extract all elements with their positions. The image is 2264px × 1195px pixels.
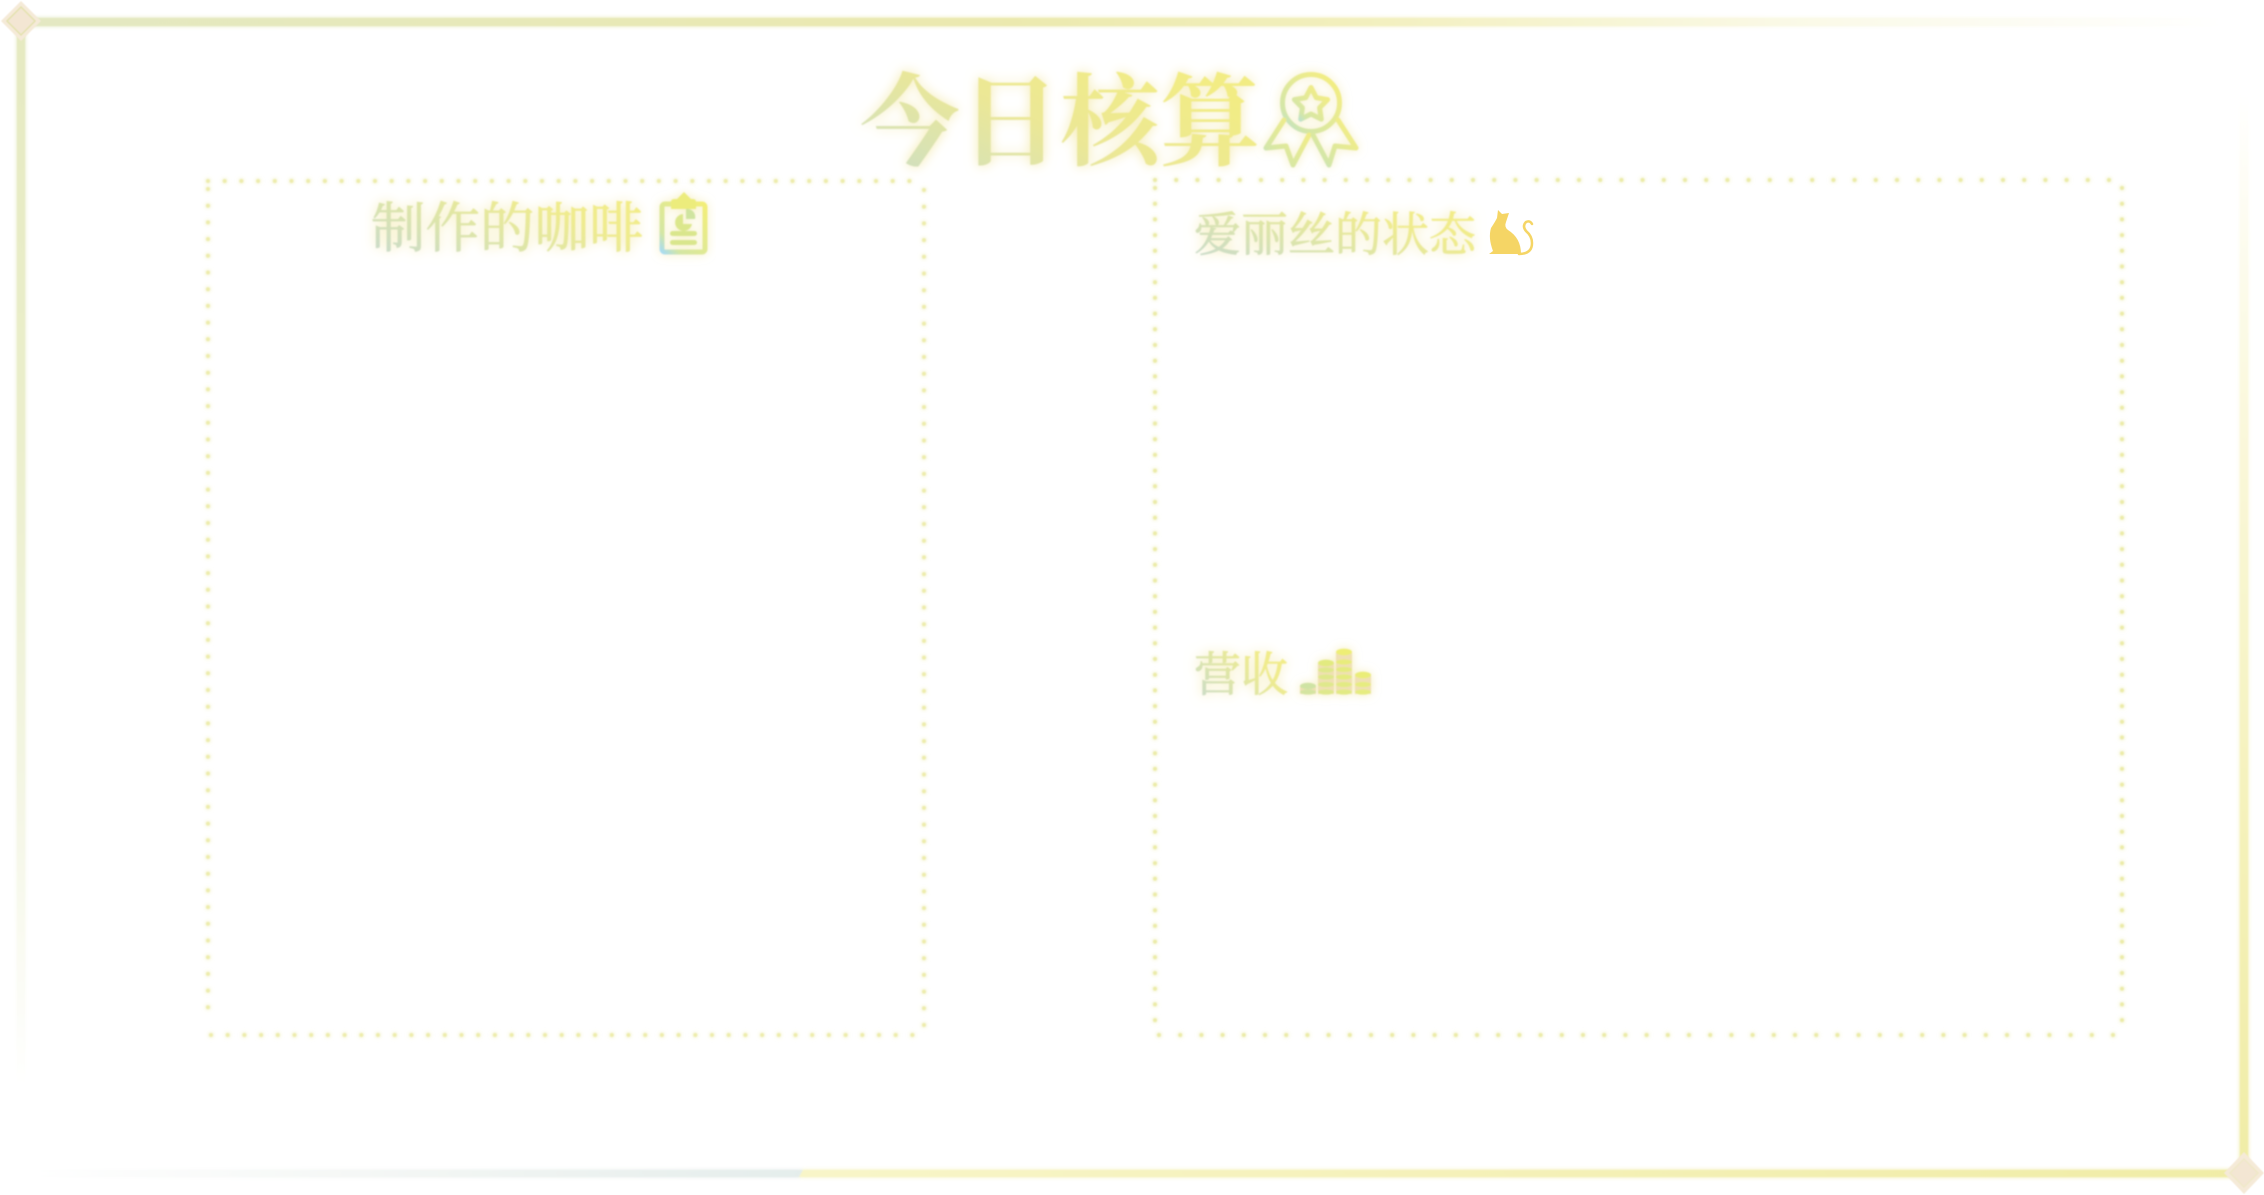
panel: coffee made: [208, 181, 924, 1035]
heading: Alice status: 爱丽丝的状态: [1194, 210, 1477, 262]
heading: coffee made: 制作的咖啡: [371, 198, 644, 259]
corner diamond top-left: [1, 1, 41, 41]
title: 今日核算: [860, 68, 1260, 179]
heading: revenue: 营收: [1194, 650, 1288, 702]
icon: cat: [1489, 210, 1532, 254]
corner diamond bottom-right: [2224, 1152, 2264, 1194]
icon: award badge: [1266, 74, 1356, 165]
icon: coin stacks: [1300, 649, 1371, 695]
icon: clipboard: [662, 192, 705, 252]
panel: Alice status and revenue: [1155, 180, 2122, 1035]
